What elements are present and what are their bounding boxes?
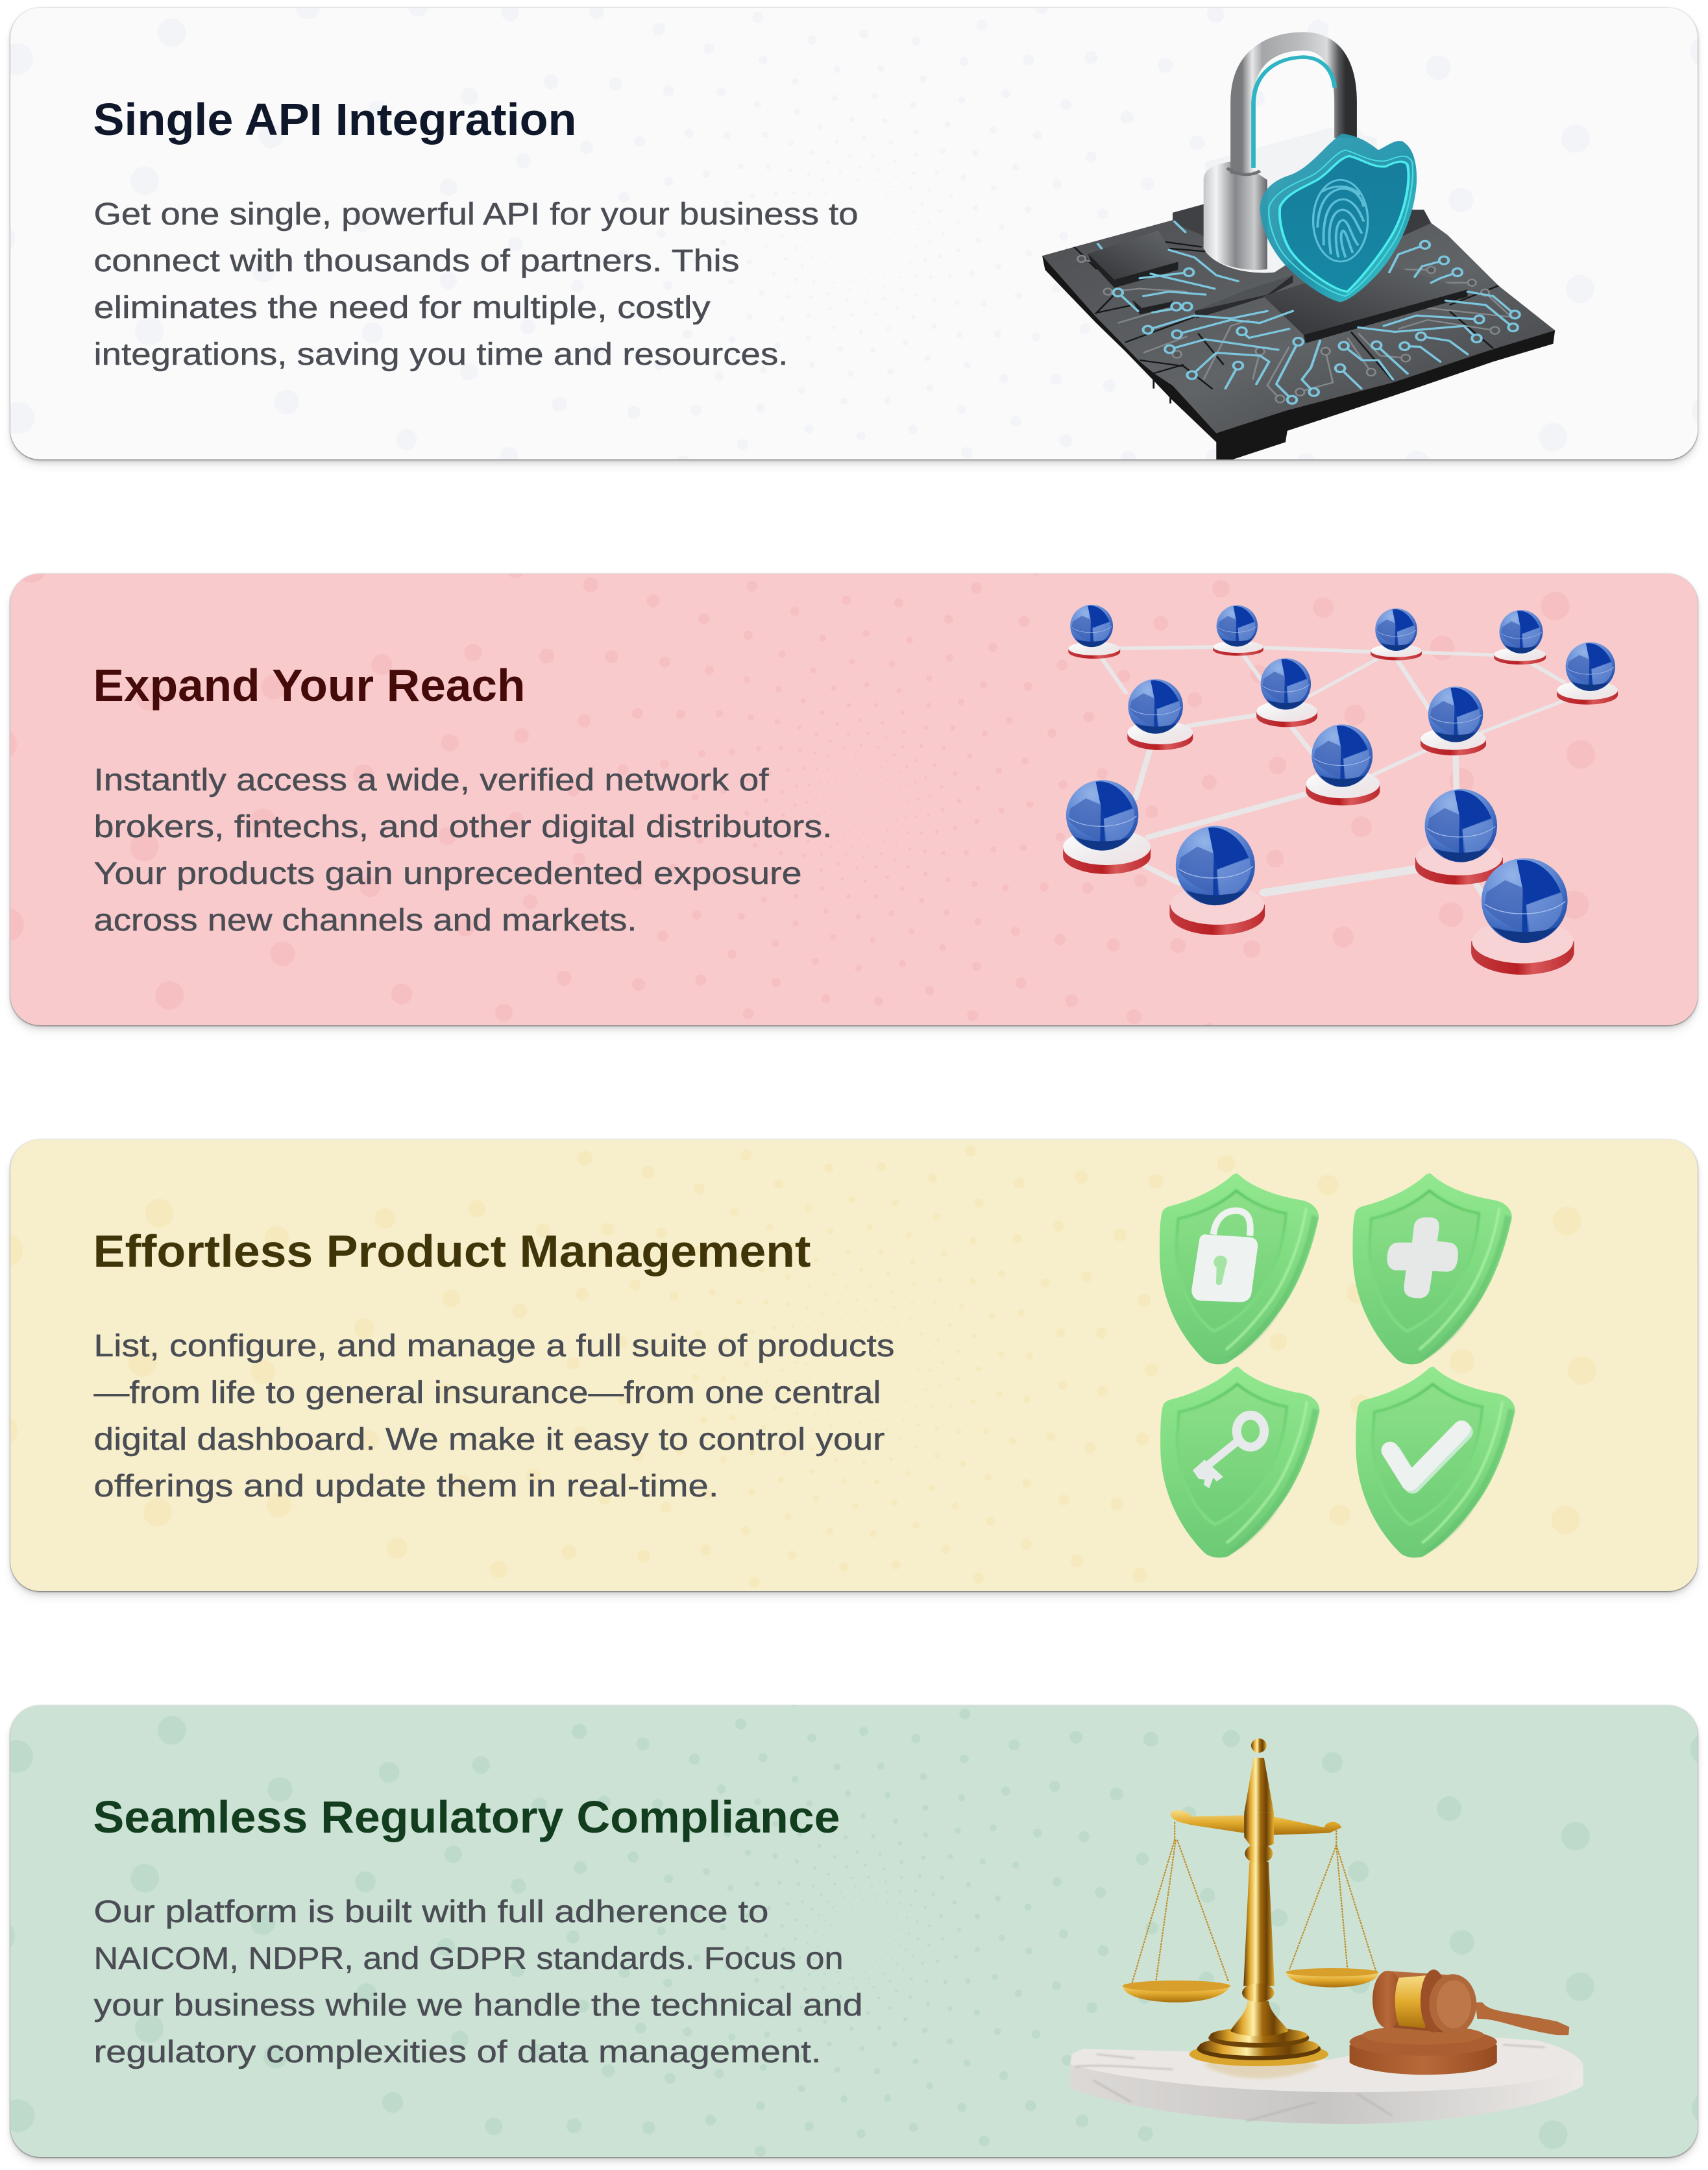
text block: compliance description bbox=[93, 1895, 863, 2069]
icon: shield with padlock bbox=[1160, 1173, 1319, 1364]
gavel and sound block bbox=[1350, 1969, 1569, 2075]
icon: holographic fingerprint shield bbox=[1260, 134, 1417, 302]
heading: Expand Your Reach: Expand Your Reach bbox=[93, 660, 526, 711]
text block: reach description: brokers, fintechs, and other digital distributors. bbox=[93, 810, 832, 844]
text block: compliance description: regulatory complexities of data management. bbox=[93, 2035, 822, 2069]
text block: API description: connect with thousands of partners. This bbox=[93, 244, 740, 278]
text block: API description: eliminates the need for multiple, costly bbox=[93, 291, 710, 325]
icon: shield with plus bbox=[1352, 1173, 1512, 1364]
heading: Effortless Product Management: Effortless Product Management bbox=[93, 1226, 811, 1276]
text block: API description: Get one single, powerful API for your business to bbox=[93, 197, 858, 232]
text block: product management description: digital dashboard. We make it easy to control your bbox=[93, 1422, 885, 1457]
icon: shield with key bbox=[1160, 1367, 1319, 1557]
balance scale bbox=[1123, 1738, 1379, 2066]
text block: API description: integrations, saving you time and resources. bbox=[93, 337, 788, 372]
panel: Single API Integration bbox=[10, 8, 1698, 459]
padlock bbox=[1204, 42, 1380, 273]
icon: shield with check mark bbox=[1356, 1367, 1515, 1557]
text block: reach description: Instantly access a wide, verified network of bbox=[93, 763, 769, 798]
network nodes bbox=[1063, 605, 1618, 975]
network connections bbox=[1100, 647, 1568, 897]
text block: compliance description: NAICOM, NDPR, and GDPR standards. Focus on bbox=[93, 1942, 844, 1976]
panel: Effortless Product Management bbox=[10, 1140, 1698, 1591]
grey traces bbox=[1082, 259, 1511, 399]
illustration: padlock on circuit board bbox=[1042, 32, 1555, 459]
text block: reach description: across new channels and markets. bbox=[93, 903, 637, 938]
text block: reach description bbox=[93, 763, 832, 938]
illustration: network of blue spheres bbox=[1063, 605, 1618, 975]
blue traces bbox=[1098, 221, 1515, 400]
text block: compliance description: Our platform is built with full adherence to bbox=[93, 1895, 768, 1929]
illustration: four green shields bbox=[1159, 1173, 1515, 1557]
text block: product management description bbox=[93, 1329, 894, 1504]
text block: reach description: Your products gain unprecedented exposure bbox=[93, 857, 802, 891]
heading: Single API Integration: Single API Integration bbox=[93, 94, 576, 145]
text block: product management description: List, configure, and manage a full suite of products bbox=[93, 1329, 894, 1363]
text block: API description bbox=[93, 197, 858, 372]
text block: product management description: —from life to general insurance—from one central bbox=[93, 1376, 881, 1410]
heading: Seamless Regulatory Compliance: Seamless Regulatory Compliance bbox=[93, 1792, 840, 1842]
raised chips bbox=[1088, 254, 1178, 287]
text block: compliance description: your business while we handle the technical and bbox=[93, 1988, 863, 2023]
text block: product management description: offerings and update them in real-time. bbox=[93, 1469, 719, 1504]
illustration: scales of justice and gavel bbox=[1071, 1738, 1583, 2124]
circuit board bbox=[1042, 204, 1555, 459]
panel: Expand Your Reach bbox=[10, 574, 1698, 1025]
marble slab bbox=[1070, 2038, 1583, 2124]
panel: Seamless Regulatory Compliance bbox=[10, 1705, 1698, 2157]
